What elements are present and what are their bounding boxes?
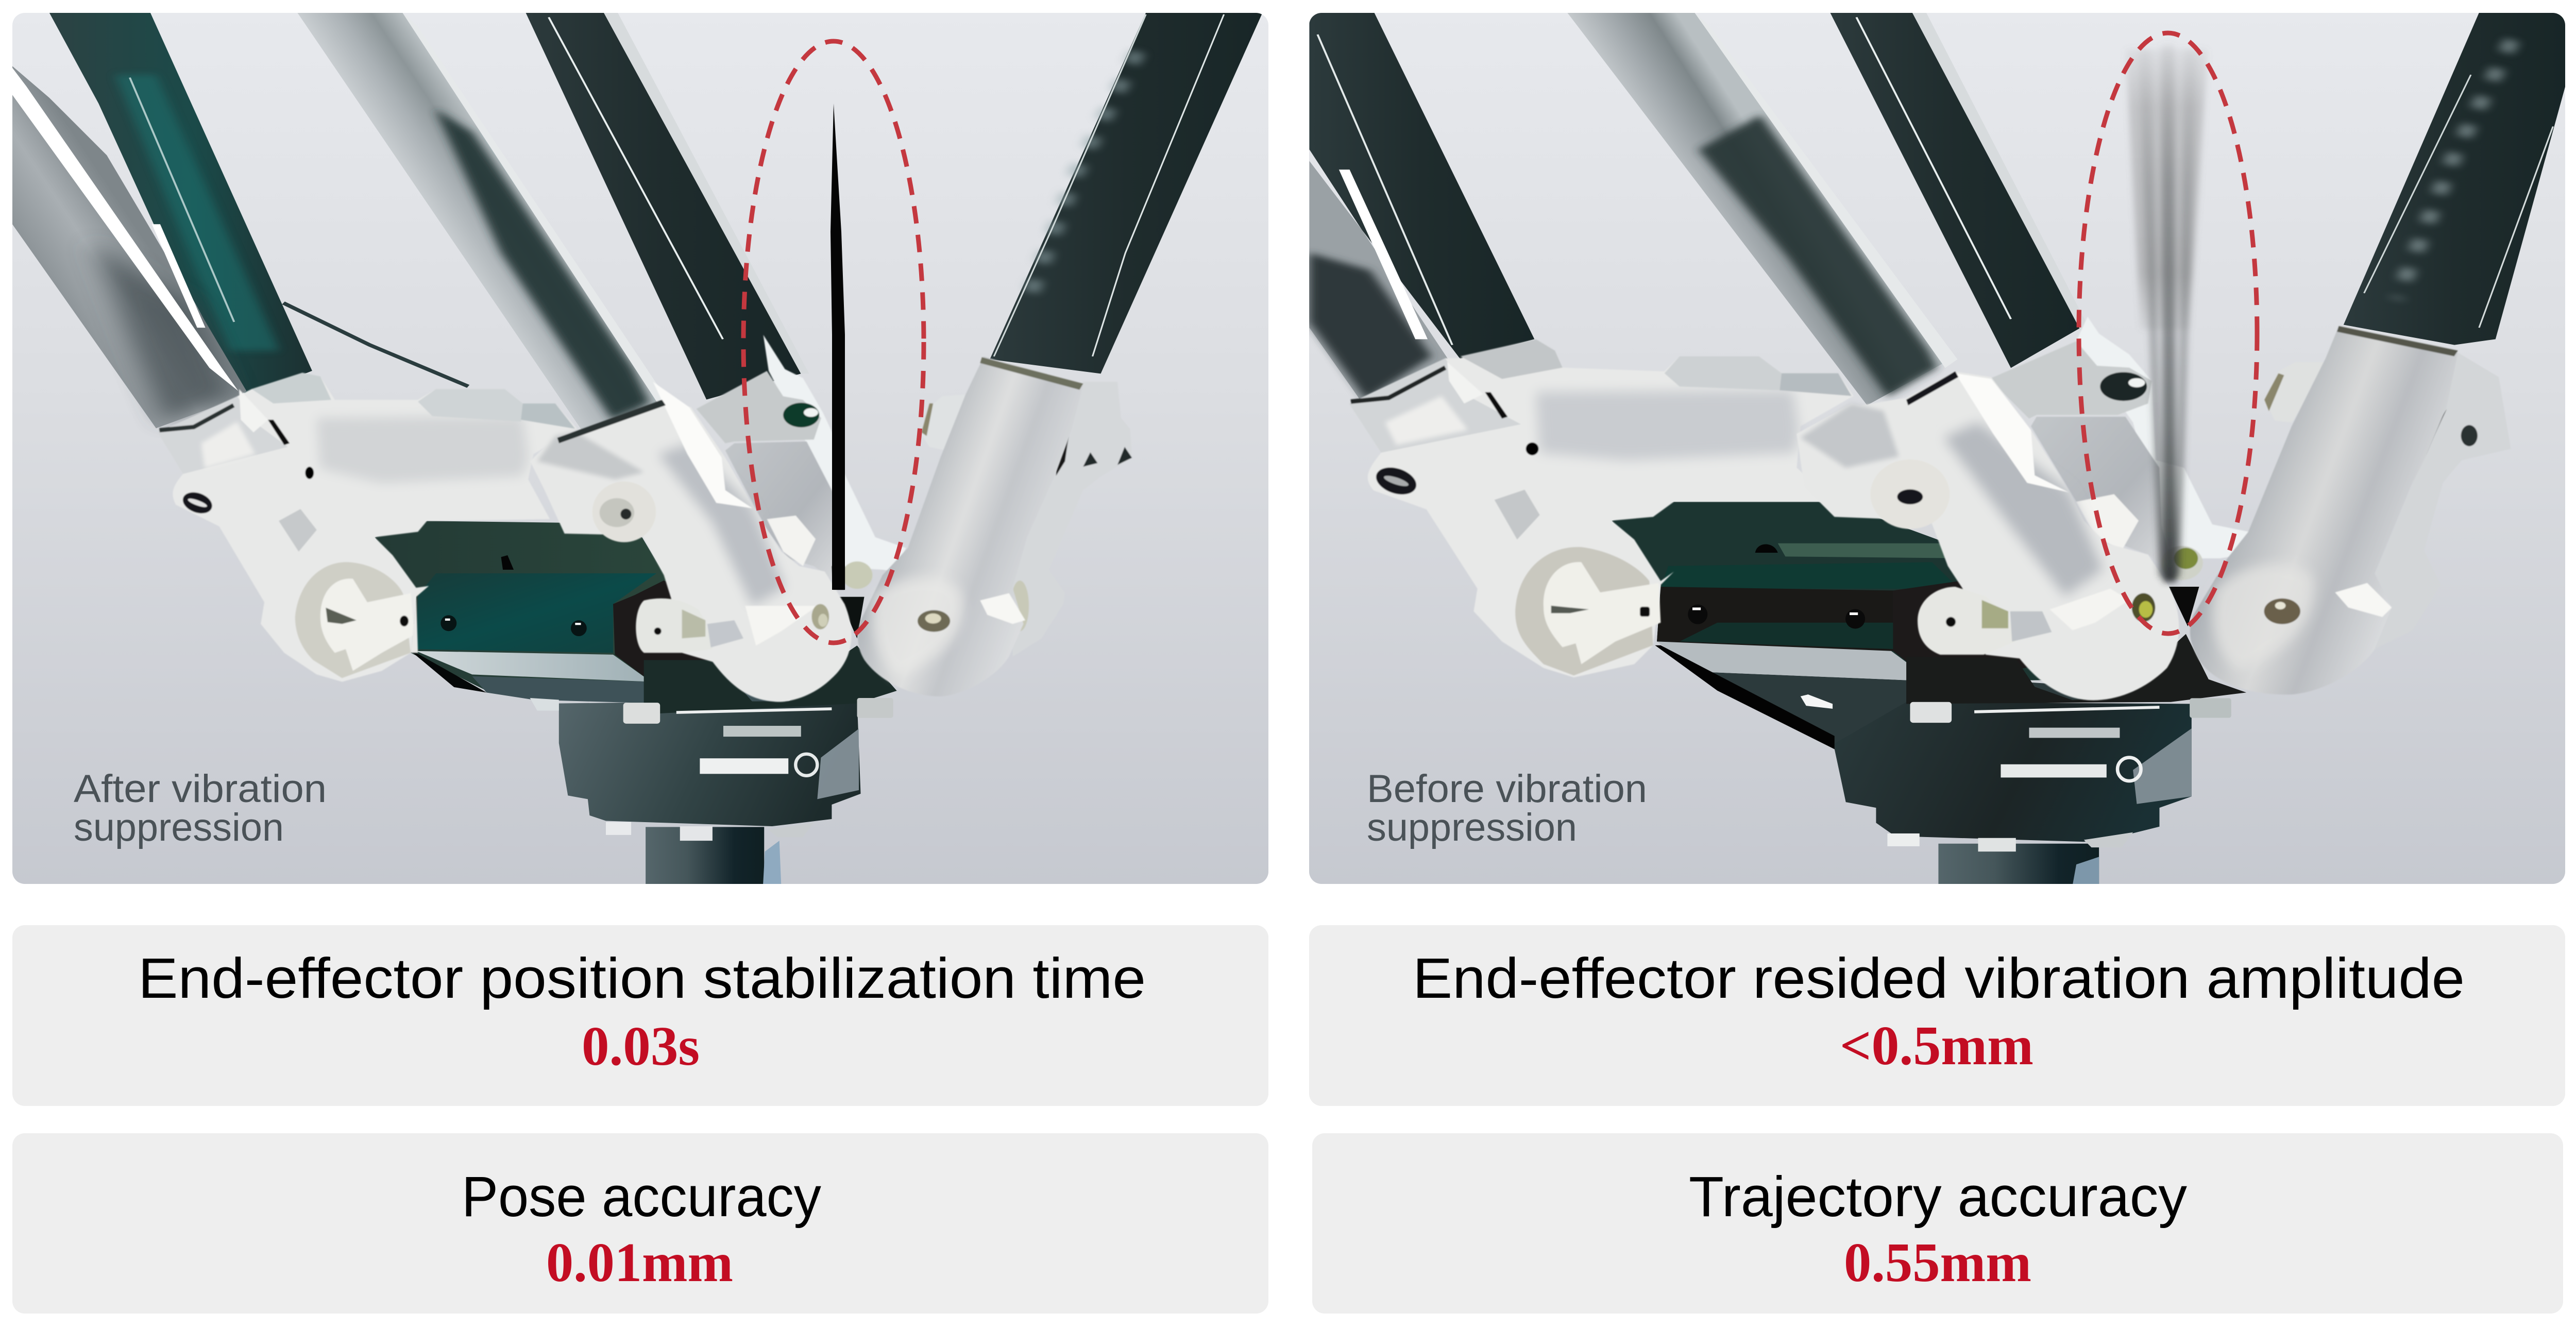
stat value: 0.03s bbox=[582, 1016, 700, 1077]
stat label: End-effector resided vibration amplitude bbox=[1413, 947, 2465, 1010]
robot illustration: after bbox=[12, 13, 1263, 885]
stat value: 0.55mm bbox=[1844, 1232, 2031, 1293]
stat card: trajectory accuracy bbox=[1312, 1133, 2563, 1314]
end-effector plate and base: before bbox=[1612, 502, 2246, 885]
caption: after vibration suppression: After vibration bbox=[74, 767, 327, 811]
middle arm with joint ball: after bbox=[530, 382, 852, 702]
stat card: residual vibration amplitude bbox=[1309, 925, 2565, 1106]
vibration blur trail bbox=[2126, 44, 2208, 582]
stat value: <0.5mm bbox=[1840, 1015, 2033, 1077]
dashed ellipse: after bbox=[743, 41, 924, 643]
stat label: Pose accuracy bbox=[462, 1165, 821, 1229]
left housing with shoulder clamp: before bbox=[1349, 339, 1853, 677]
far joint and rear linkage: after bbox=[697, 335, 1132, 656]
caption: before vibration suppression bbox=[1367, 767, 1647, 849]
stat label: Trajectory accuracy bbox=[1689, 1165, 2187, 1229]
left housing with shoulder clamp: after bbox=[158, 373, 577, 681]
end-effector plate and base: after bbox=[375, 521, 897, 885]
caption: before vibration suppression: suppression bbox=[1367, 806, 1577, 849]
far joint and rear linkage: before bbox=[1989, 317, 2511, 649]
needle: stable end-effector bbox=[831, 104, 845, 590]
stat value: 0.01mm bbox=[546, 1232, 733, 1293]
robot illustration: before bbox=[1309, 13, 2565, 885]
caption: after vibration suppression: suppression bbox=[74, 806, 284, 849]
stat card: stabilization time bbox=[12, 925, 1268, 1106]
right arm with joint ball: after bbox=[858, 356, 1083, 696]
middle arm with joint ball: before bbox=[1797, 371, 2179, 700]
right arm with joint ball: before bbox=[2190, 326, 2458, 694]
dashed ellipse: before bbox=[2079, 33, 2257, 634]
stat card: pose accuracy bbox=[12, 1133, 1268, 1314]
caption: before vibration suppression: Before vibration bbox=[1367, 767, 1647, 811]
panel: before vibration suppression bbox=[1309, 13, 2565, 885]
caption: after vibration suppression bbox=[74, 767, 327, 849]
stat label: End-effector position stabilization time bbox=[138, 947, 1146, 1010]
panel: after vibration suppression bbox=[12, 13, 1268, 885]
